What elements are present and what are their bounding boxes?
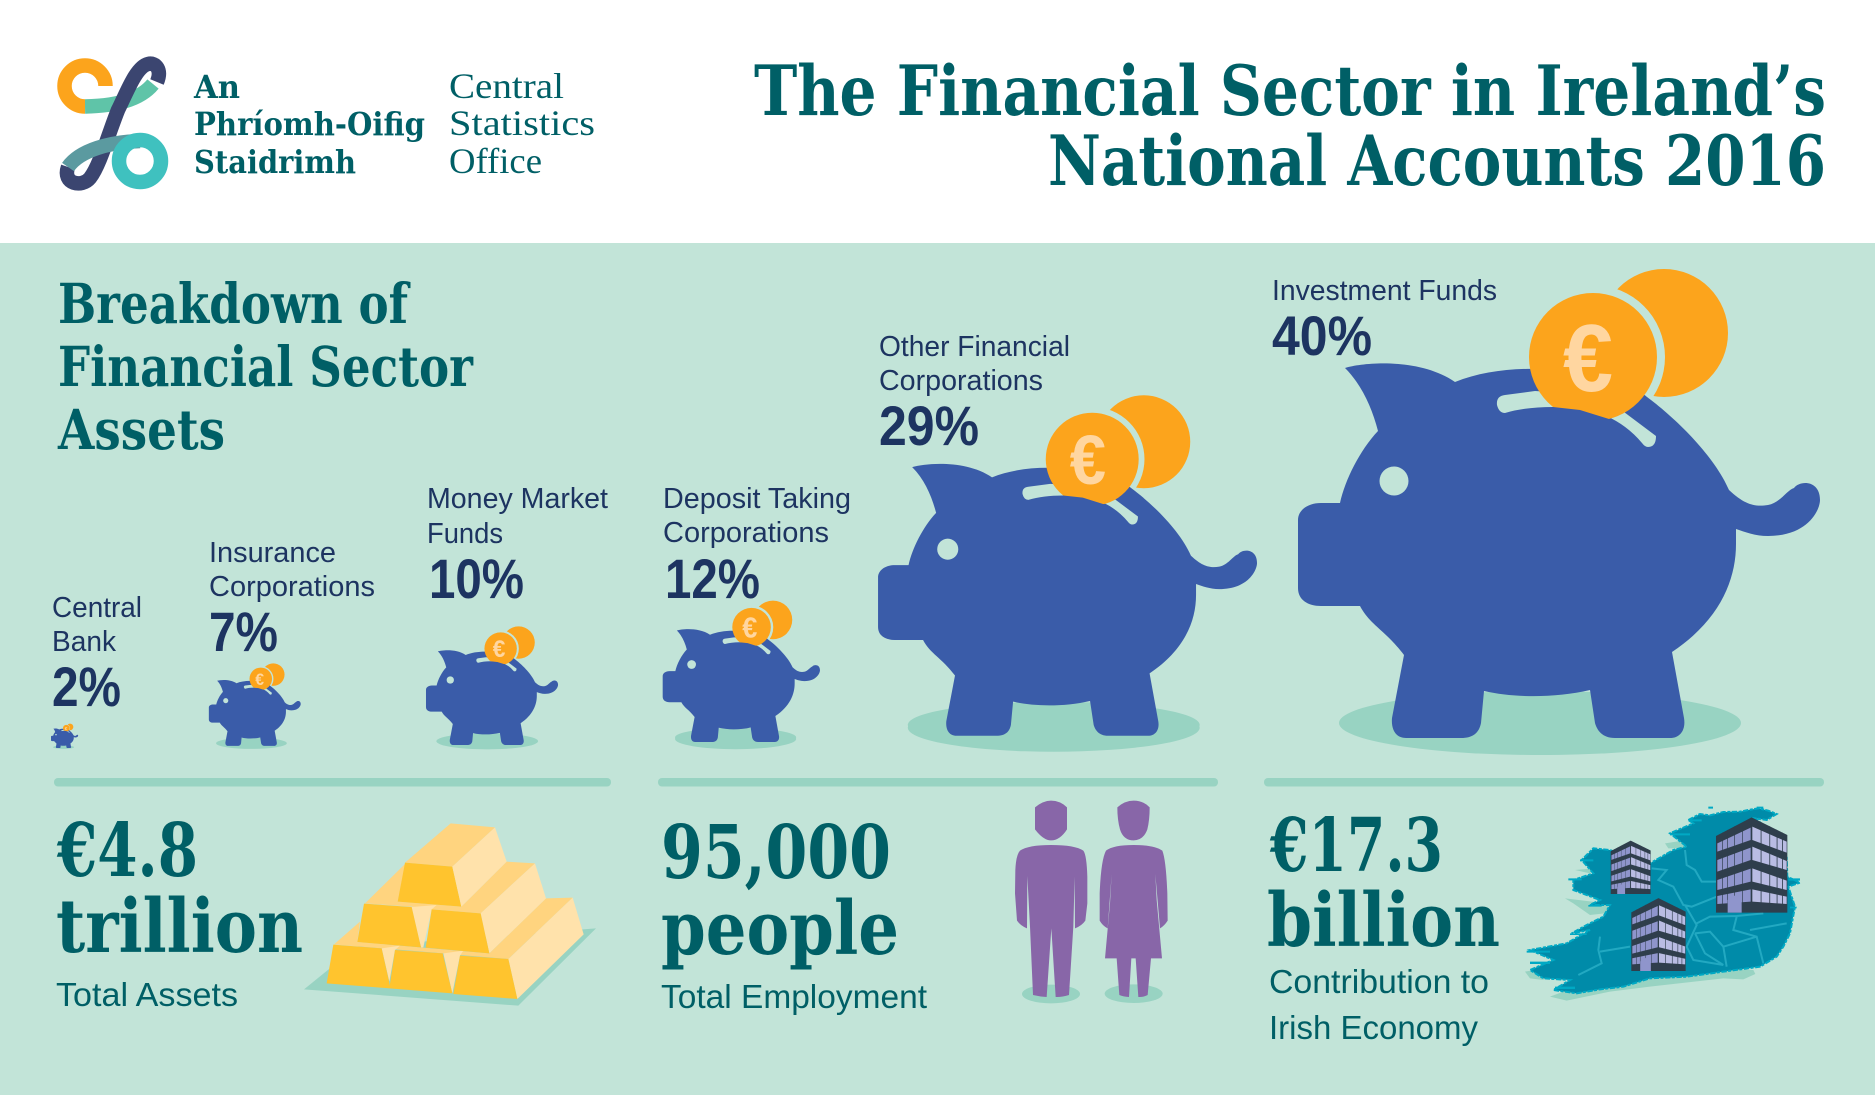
stat: total employment: 95,000 [661, 810, 891, 896]
heading: breakdown: Assets [57, 397, 225, 462]
stat: contribution to economy [1267, 803, 1500, 1046]
header band [0, 0, 1875, 243]
icon: piggy bank 40% [1298, 269, 1820, 755]
stat: total employment: people [661, 886, 899, 972]
label: Central Bank 2% [52, 592, 142, 718]
stat: total assets: Total Assets [56, 976, 238, 1013]
logo text: English name: Statistics [449, 103, 595, 143]
logo text: English name: Office [449, 141, 542, 181]
label: Deposit Taking Corporations 12%: Corporations [663, 517, 829, 549]
stat: total assets: €4.8 [56, 808, 198, 894]
icon: piggy bank 10% [426, 626, 558, 749]
heading: breakdown: Breakdown of [58, 271, 411, 336]
stat: total assets [56, 808, 303, 1013]
label: Insurance Corporations 7%: Corporations [209, 571, 375, 603]
label: Insurance Corporations 7%: 7% [209, 600, 278, 663]
logo text: Irish name: An [193, 68, 240, 106]
label: Money Market Funds 10%: Money Market [427, 483, 608, 515]
icon: man and woman [1015, 801, 1168, 1003]
stat: contribution to economy: €17.3 [1269, 803, 1443, 889]
stat: contribution to economy: Contribution to [1269, 963, 1489, 1000]
label: Money Market Funds 10%: Funds [427, 518, 503, 550]
stat: total employment [661, 810, 927, 1015]
icon: map of Ireland with office buildings [1525, 807, 1800, 1001]
icon: gold bars [304, 823, 596, 1006]
label: Deposit Taking Corporations 12%: Deposit Taking [663, 483, 851, 515]
icon: piggy bank 10%: € [493, 636, 506, 663]
stat: total employment: Total Employment [661, 978, 927, 1015]
icon: piggy bank 40%: € [1563, 305, 1613, 412]
label: Insurance Corporations 7% [209, 537, 375, 663]
label: Central Bank 2%: Central [52, 592, 142, 624]
logo text: Irish name: Staidrimh [194, 143, 356, 181]
label: Investment Funds 40% [1272, 275, 1497, 367]
stat: contribution to economy: Irish Economy [1269, 1009, 1478, 1046]
icon: piggy bank 2%: € [65, 726, 68, 732]
stat: contribution to economy: billion [1267, 878, 1500, 964]
icon: piggy bank 12% [663, 601, 820, 749]
heading: breakdown [57, 271, 474, 462]
icon: piggy bank 2% [51, 724, 78, 749]
label: Other Financial Corporations 29%: Corporations [879, 365, 1043, 397]
label: Investment Funds 40%: Investment Funds [1272, 275, 1497, 307]
logo text: Irish name [193, 68, 425, 181]
logo text: English name: Central [449, 66, 564, 106]
icon: piggy bank 29% [878, 395, 1257, 752]
heading: breakdown: Financial Sector [58, 334, 474, 399]
label: Investment Funds 40%: 40% [1272, 304, 1372, 367]
logo text: Irish name: Phríomh-Oifig [194, 105, 425, 143]
label: Deposit Taking Corporations 12% [663, 483, 851, 610]
icon: piggy bank 7% [209, 663, 301, 749]
label: Insurance Corporations 7%: Insurance [209, 537, 336, 569]
label: Other Financial Corporations 29% [879, 331, 1070, 457]
label: Money Market Funds 10%: 10% [429, 547, 524, 610]
icon: piggy bank 29%: € [1070, 421, 1106, 499]
label: Central Bank 2%: Bank [52, 626, 117, 658]
icon: piggy bank 7%: € [255, 670, 265, 689]
label: Other Financial Corporations 29%: 29% [879, 394, 979, 457]
stat: total assets: trillion [56, 884, 303, 970]
label: Deposit Taking Corporations 12%: 12% [665, 547, 760, 610]
logo text: English name [449, 66, 595, 181]
logo: CSO mark [64, 64, 161, 183]
title [754, 51, 1826, 202]
label: Other Financial Corporations 29%: Other Financial [879, 331, 1070, 363]
label: Money Market Funds 10% [427, 483, 608, 610]
icon: piggy bank 12%: € [742, 612, 757, 644]
label: Central Bank 2%: 2% [52, 655, 121, 718]
